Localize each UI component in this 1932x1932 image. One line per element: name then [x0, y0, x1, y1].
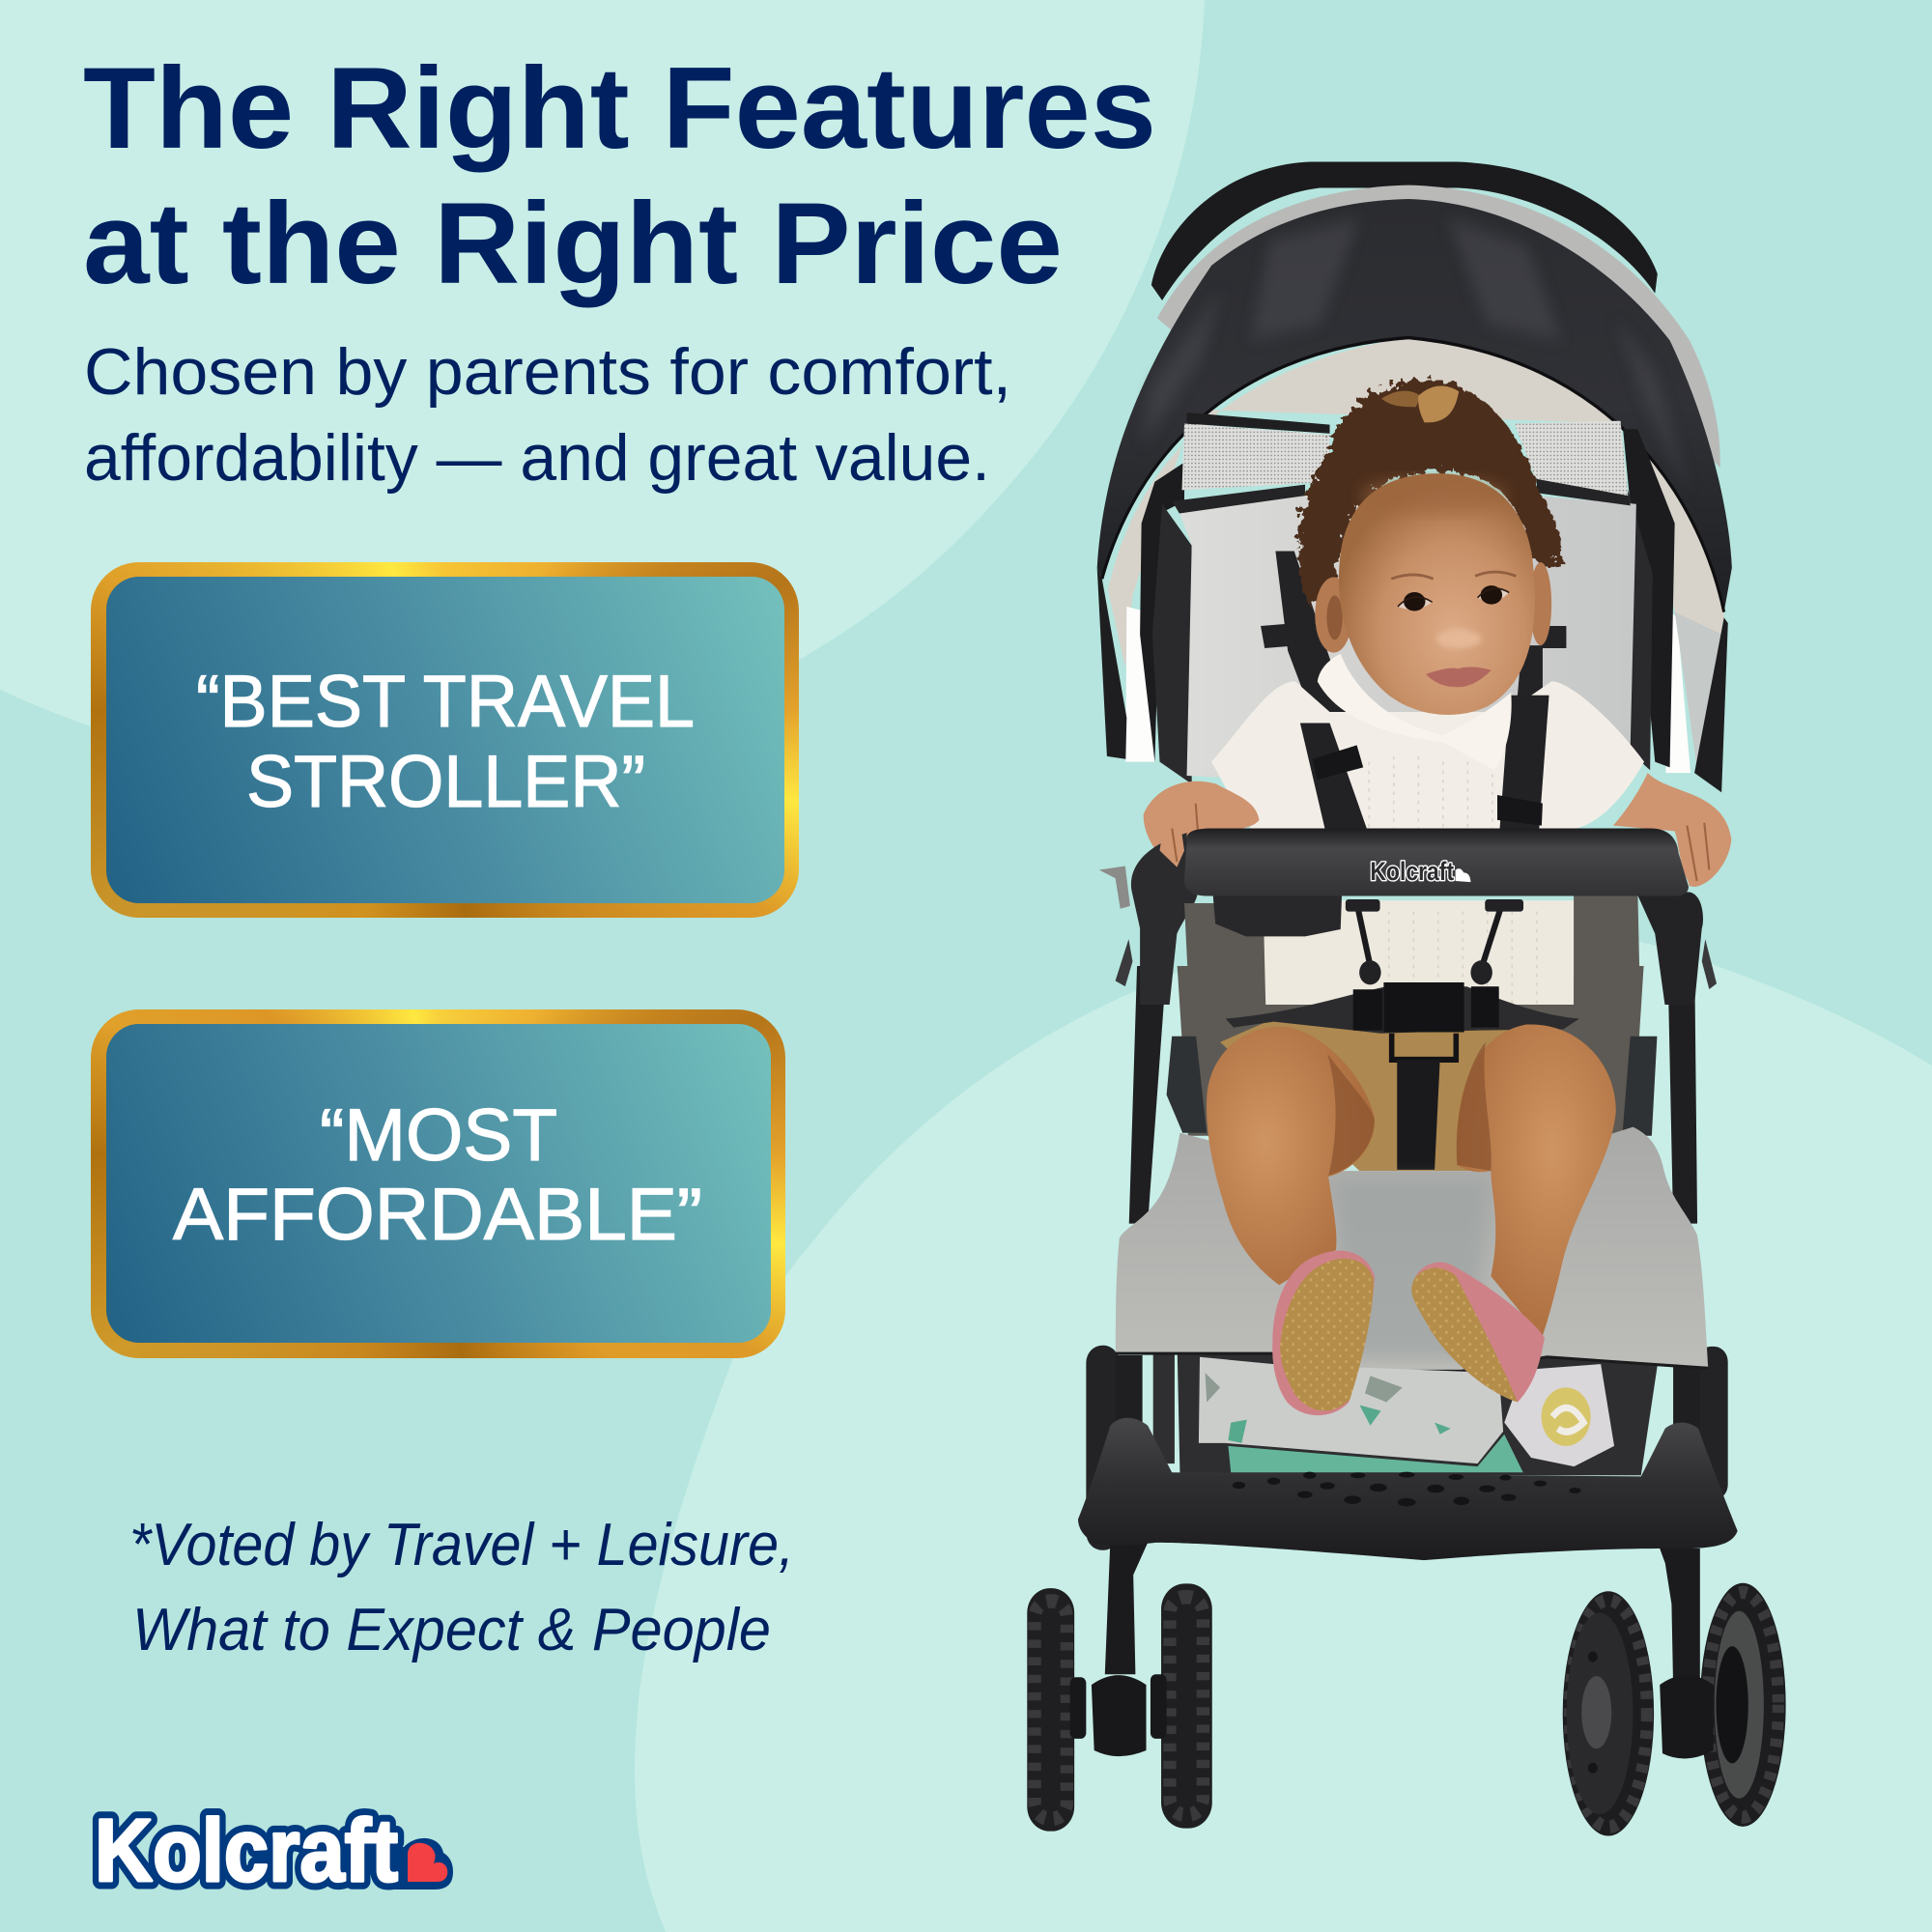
canopy fabric	[1097, 199, 1732, 612]
canopy underside	[1108, 338, 1724, 784]
right shoe	[1411, 1263, 1545, 1402]
footnote: What to Expect & People	[132, 1597, 771, 1663]
blankets	[1199, 1357, 1523, 1472]
front left wheel outer	[1027, 1588, 1074, 1832]
mouth	[1426, 668, 1492, 687]
badge: best travel stroller	[91, 562, 799, 918]
shirt below tray	[1259, 900, 1576, 1005]
logo: Kolcraft: Kolcraft	[95, 1802, 398, 1900]
logo: Kolcraft: Kolcraft	[95, 1802, 398, 1900]
front left wheel inner	[1161, 1583, 1212, 1829]
canopy seam	[1102, 338, 1724, 612]
tray logo: Kolcraft	[1370, 858, 1455, 886]
white gaps	[1125, 607, 1154, 762]
crotch strap	[1397, 1060, 1440, 1170]
badge: most affordable	[91, 1009, 785, 1358]
right wheel back	[1700, 1583, 1786, 1827]
canopy rim	[1157, 185, 1720, 468]
shirt knit texture	[1369, 756, 1537, 1005]
side mesh	[1167, 1037, 1207, 1133]
shorts	[1220, 1019, 1531, 1171]
strap buckles	[1313, 745, 1543, 826]
lap belt	[1226, 986, 1579, 1034]
cup holder	[1212, 888, 1342, 936]
tray logo: Kolcraft	[1370, 858, 1455, 886]
badge: most affordable: “MOST	[320, 1094, 557, 1177]
seat side wings	[1152, 504, 1192, 784]
side clips	[1099, 867, 1717, 989]
seat edge	[1116, 1353, 1708, 1371]
lower strap and clips	[1300, 696, 1549, 829]
face	[1339, 473, 1535, 715]
inner thigh shadow	[1327, 1042, 1492, 1176]
footrest	[1078, 1418, 1738, 1560]
lower chassis: wheels and rails	[1027, 966, 1786, 1836]
basket backing	[1178, 1350, 1660, 1475]
title	[83, 43, 1156, 308]
left caster hub	[1070, 1674, 1167, 1756]
right caster hub	[1660, 1675, 1714, 1758]
badge: best travel stroller: “BEST TRAVEL	[196, 661, 695, 743]
collar	[1318, 654, 1512, 770]
tether rings	[1346, 899, 1523, 984]
brows	[1391, 572, 1516, 579]
subtitle: affordability — and great value.	[84, 421, 990, 495]
handlebar	[1151, 162, 1658, 300]
eyes	[1398, 585, 1509, 611]
subtitle: Chosen by parents for comfort,	[84, 335, 1011, 409]
footnote: *Voted by Travel + Leisure,	[129, 1512, 794, 1578]
badge: most affordable: AFFORDABLE”	[173, 1174, 702, 1256]
forehead shade	[1359, 478, 1507, 513]
right flap shade	[1675, 612, 1721, 784]
left flap	[1097, 568, 1126, 759]
frame under tray left	[1131, 833, 1198, 1005]
side rails	[1116, 966, 1700, 1463]
left caster legs	[1105, 1543, 1148, 1674]
hair bow	[1381, 386, 1459, 422]
footrest dots	[1233, 1472, 1581, 1506]
inner seat panels	[1184, 903, 1265, 1005]
title: The Right Features	[83, 43, 1156, 173]
finger creases	[1172, 804, 1709, 881]
hair	[1298, 379, 1562, 607]
left fingers over tray	[1160, 834, 1184, 867]
footnote	[129, 1512, 794, 1663]
seat cloth	[1116, 1127, 1708, 1371]
tray	[1184, 829, 1689, 896]
title: at the Right Price	[83, 179, 1063, 308]
icon: heart	[408, 1843, 447, 1882]
left hand	[1144, 781, 1260, 865]
seat centre shade	[1333, 1179, 1491, 1358]
right knee leg	[1457, 1024, 1616, 1338]
left shoe	[1272, 1251, 1375, 1415]
mesh window	[1181, 412, 1628, 496]
right wheel front	[1563, 1591, 1654, 1836]
shirt	[1211, 681, 1644, 829]
rolled blanket	[1504, 1364, 1614, 1466]
left knee leg	[1207, 1027, 1375, 1285]
right fingers over tray	[1677, 839, 1704, 887]
left inner frame	[1140, 463, 1184, 762]
upper stroller and baby torso	[1097, 162, 1732, 1005]
seat back lower	[1178, 966, 1644, 1136]
nose	[1435, 629, 1482, 648]
seat back pad	[1179, 496, 1636, 789]
right arm hand	[1613, 773, 1731, 887]
subtitle	[84, 335, 1011, 495]
badge: best travel stroller: STROLLER”	[246, 741, 645, 823]
buckle	[1353, 982, 1499, 1060]
upper harness straps	[1261, 551, 1566, 762]
lower seat, legs and footrest	[1078, 982, 1738, 1560]
canopy folds	[1143, 218, 1690, 496]
rear wheels behind footrest	[1086, 1346, 1728, 1550]
right caster legs	[1660, 1548, 1700, 1686]
ears	[1315, 562, 1551, 653]
frame under tray right	[1636, 893, 1703, 1005]
tether straps	[1357, 903, 1502, 973]
